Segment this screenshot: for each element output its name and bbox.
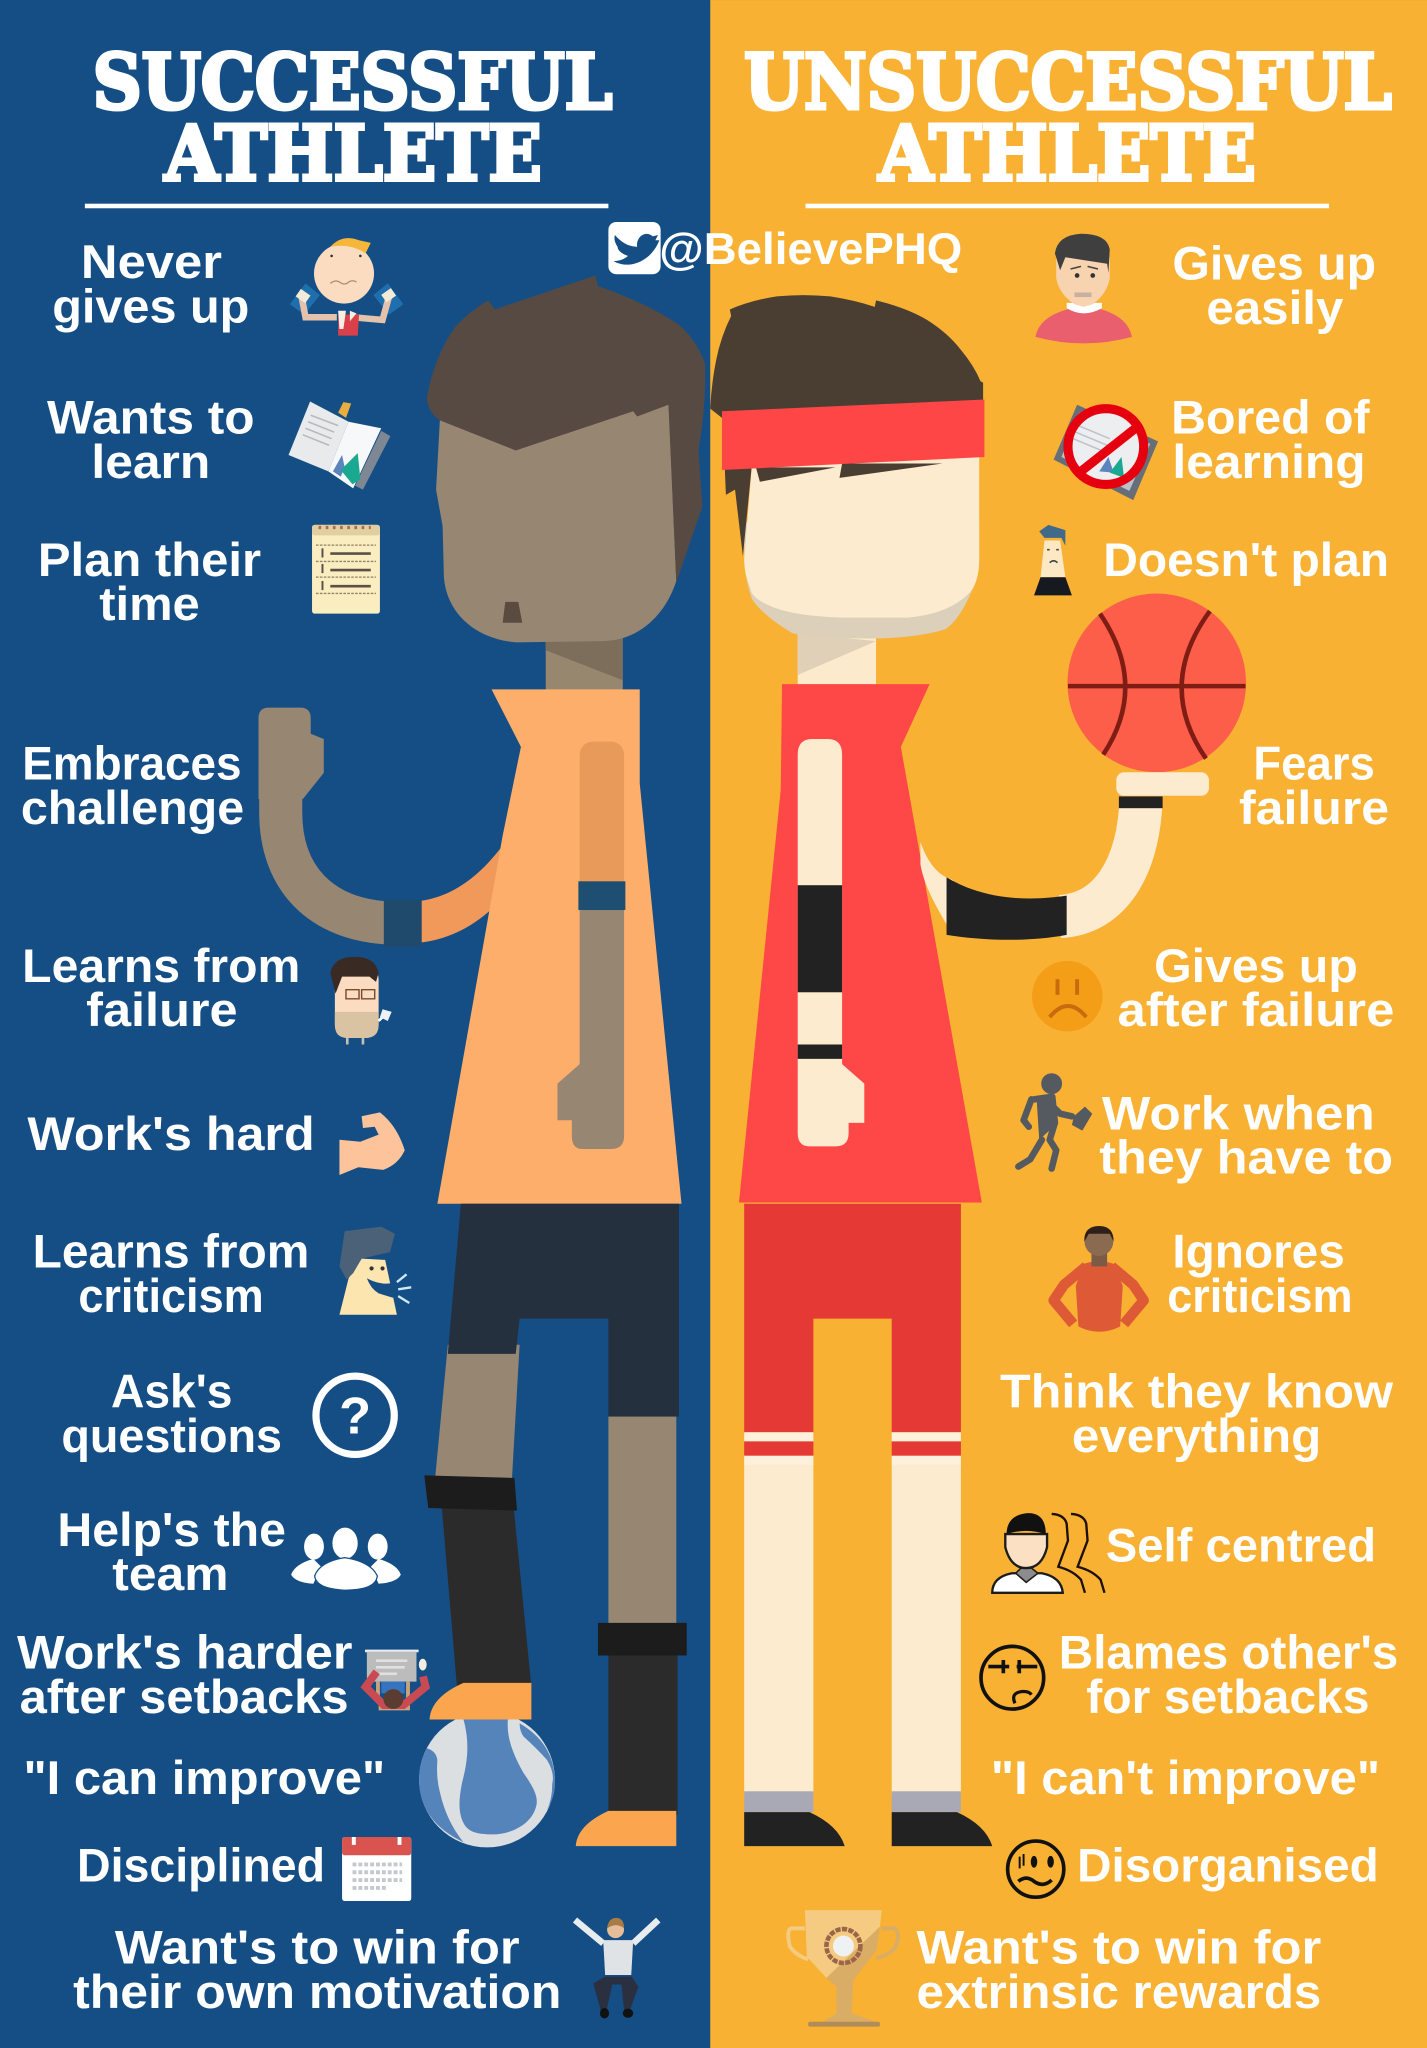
label: plan their time (38, 533, 261, 630)
label: learns from failure (22, 939, 300, 1036)
label: wants to win for own motivation: their own motivation (73, 1965, 561, 2018)
torso (437, 689, 682, 1204)
label: blames others for setbacks (1059, 1626, 1398, 1723)
right wristband (578, 881, 625, 910)
label: self centred: Self centred (1106, 1519, 1376, 1572)
label: fears failure (1239, 736, 1389, 834)
icon: question mark (316, 1376, 394, 1454)
shoes (744, 1812, 992, 1846)
icon: prohibited book (1054, 405, 1158, 500)
shorts (448, 1204, 679, 1417)
label: learns from criticism (33, 1225, 309, 1322)
icon: disorganised face (1008, 1841, 1064, 1897)
twitter handle: @BelievePHQ (659, 225, 962, 274)
label: wants to learn: Wants to (47, 390, 255, 443)
label: embraces challenge (21, 736, 244, 834)
figure: unsuccessful athlete (710, 295, 1246, 1846)
nose (503, 602, 522, 623)
title underline right (806, 204, 1329, 208)
label: learns from failure: failure (86, 983, 238, 1036)
label: disciplined: Disciplined (77, 1838, 325, 1891)
black sleeve (947, 877, 1067, 940)
icon: walking man with briefcase (1018, 1073, 1092, 1169)
icon: blaming face (981, 1646, 1044, 1709)
kicking shoe (430, 1683, 531, 1719)
label: think they know everything (1000, 1364, 1394, 1462)
near arm (798, 739, 864, 1146)
ankles (744, 1791, 961, 1812)
label: helps the team: team (112, 1547, 228, 1600)
label: bored of learning (1171, 390, 1370, 488)
headband (722, 400, 984, 470)
label: gives up easily: Gives up (1172, 236, 1376, 289)
standing shoe (576, 1811, 676, 1846)
kicking sock (441, 1501, 531, 1687)
icon: sad young man (1035, 234, 1132, 343)
left wristband (384, 900, 422, 947)
chin shade (744, 522, 979, 638)
label: wants to win for own motivation (73, 1921, 561, 2018)
near arm bands (798, 885, 842, 1059)
neck shade (798, 633, 876, 675)
forearm (1060, 799, 1141, 917)
label: ignores criticism: criticism (1167, 1269, 1353, 1322)
panel: unsuccessful background (710, 0, 1427, 2048)
shorts (744, 1204, 961, 1432)
left forearm and hand (259, 708, 392, 923)
standing sock band (598, 1623, 687, 1656)
right forearm and hand (557, 907, 624, 1149)
hair (427, 276, 705, 582)
label: blames others for setbacks: for setbacks (1086, 1670, 1370, 1723)
label: plan their time: Plan their (38, 533, 261, 586)
label: embraces challenge: challenge (21, 781, 244, 834)
right column labels (917, 236, 1398, 2018)
icon: trophy (788, 1910, 898, 2027)
face (744, 450, 979, 618)
icon: team (291, 1528, 401, 1590)
label: plan their time: time (99, 577, 200, 630)
basketball (1067, 594, 1246, 772)
label: gives up after failure (1118, 939, 1394, 1036)
label: embraces challenge: Embraces (22, 736, 242, 789)
legs (744, 1462, 961, 1794)
label: gives up easily: easily (1206, 281, 1343, 334)
label: works harder after setbacks: Work's harder (17, 1626, 353, 1679)
label: fears failure: Fears (1253, 736, 1375, 789)
label: helps the team (57, 1503, 286, 1600)
neck (546, 633, 623, 692)
label: think they know everything: Think they know (1000, 1364, 1394, 1417)
left upper arm (420, 842, 505, 943)
label: wants to learn (47, 390, 255, 488)
label: wants to win for extrinsic rewards (917, 1921, 1321, 2018)
kicking thigh (435, 1345, 520, 1482)
label: work when they have to: they have to (1099, 1131, 1393, 1184)
standing sock (608, 1652, 678, 1815)
label: never gives up: gives up (52, 280, 249, 333)
label: blames others for setbacks: Blames other's (1059, 1626, 1398, 1679)
icon: question mark: ? (339, 1388, 371, 1446)
label: asks questions: Ask's (111, 1364, 232, 1417)
right sleeve (580, 742, 624, 898)
label: never gives up (52, 235, 249, 333)
icon: cheering man (575, 1918, 658, 2018)
label: gives up easily (1172, 236, 1376, 334)
torso (739, 684, 982, 1202)
label: bored of learning: learning (1172, 435, 1366, 488)
icon: self-centred people (992, 1513, 1105, 1593)
label: wants to win for extrinsic rewards: Want's to win for (917, 1921, 1321, 1974)
label: learns from criticism: Learns from (33, 1225, 309, 1278)
title: successful athlete: ATHLETE (164, 109, 542, 198)
label: disorganised: Disorganised (1077, 1838, 1379, 1891)
icon: flexed muscle (339, 1112, 405, 1175)
wristband and palm (1116, 772, 1209, 808)
title: successful athlete (93, 37, 612, 198)
label: gives up after failure: Gives up (1154, 939, 1358, 992)
label: learns from failure: Learns from (22, 939, 300, 992)
neck (798, 627, 876, 687)
label: doesn't plan: Doesn't plan (1103, 533, 1389, 586)
label: ignores criticism (1167, 1225, 1353, 1322)
label: fears failure: failure (1239, 781, 1389, 834)
label: asks questions (61, 1364, 282, 1462)
title underline left (85, 204, 608, 208)
icon: flexing businessman (290, 238, 403, 336)
label: ignores criticism: Ignores (1172, 1225, 1345, 1278)
label: i can improve: "I can improve" (24, 1751, 385, 1804)
label: work when they have to: Work when (1102, 1086, 1375, 1139)
label: works harder after setbacks: after setbacks (20, 1670, 349, 1723)
label: helps the team: Help's the (57, 1503, 286, 1556)
label: gives up after failure: after failure (1118, 983, 1394, 1036)
hair side and bangs (725, 464, 943, 556)
head (436, 398, 676, 642)
title: successful athlete: SUCCESSFUL (93, 37, 612, 126)
icon: open book (289, 401, 390, 490)
icon: shouting man (339, 1227, 411, 1315)
label: bored of learning: Bored of (1171, 390, 1370, 443)
title: unsuccessful athlete: ATHLETE (878, 109, 1256, 198)
label: wants to win for extrinsic rewards: extrinsic rewards (917, 1965, 1321, 2018)
panel: successful background (0, 0, 710, 2048)
label: work when they have to (1099, 1086, 1393, 1184)
label: works hard: Work's hard (27, 1107, 315, 1160)
label: think they know everything: everything (1072, 1409, 1321, 1462)
label: asks questions: questions (61, 1409, 282, 1462)
left column labels (17, 235, 561, 2018)
figure: successful athlete (259, 276, 705, 1847)
label: learns from criticism: criticism (78, 1269, 264, 1322)
icon: calendar (342, 1837, 411, 1901)
label: works harder after setbacks (17, 1626, 353, 1723)
standing thigh (608, 1417, 676, 1628)
icon: tiny man (1034, 525, 1072, 595)
hair top (710, 295, 983, 418)
sock stripes (744, 1432, 961, 1465)
kicking sock band (424, 1475, 517, 1511)
tennis ball (419, 1712, 555, 1847)
label: i can't improve: "I can't improve" (991, 1751, 1380, 1804)
icon: arms-on-hips man (1054, 1226, 1144, 1332)
label: never gives up: Never (81, 235, 222, 288)
icon: person working at desk from above (365, 1650, 427, 1710)
twitter icon (608, 222, 661, 274)
icon: sad orange face (1032, 961, 1103, 1031)
label: wants to win for own motivation: Want's to win for (115, 1921, 520, 1974)
label: wants to learn: learn (91, 435, 210, 488)
icon: man with glasses (330, 957, 392, 1044)
title: unsuccessful athlete (744, 37, 1392, 198)
upper arm (920, 842, 953, 935)
icon: notepad (312, 525, 380, 614)
